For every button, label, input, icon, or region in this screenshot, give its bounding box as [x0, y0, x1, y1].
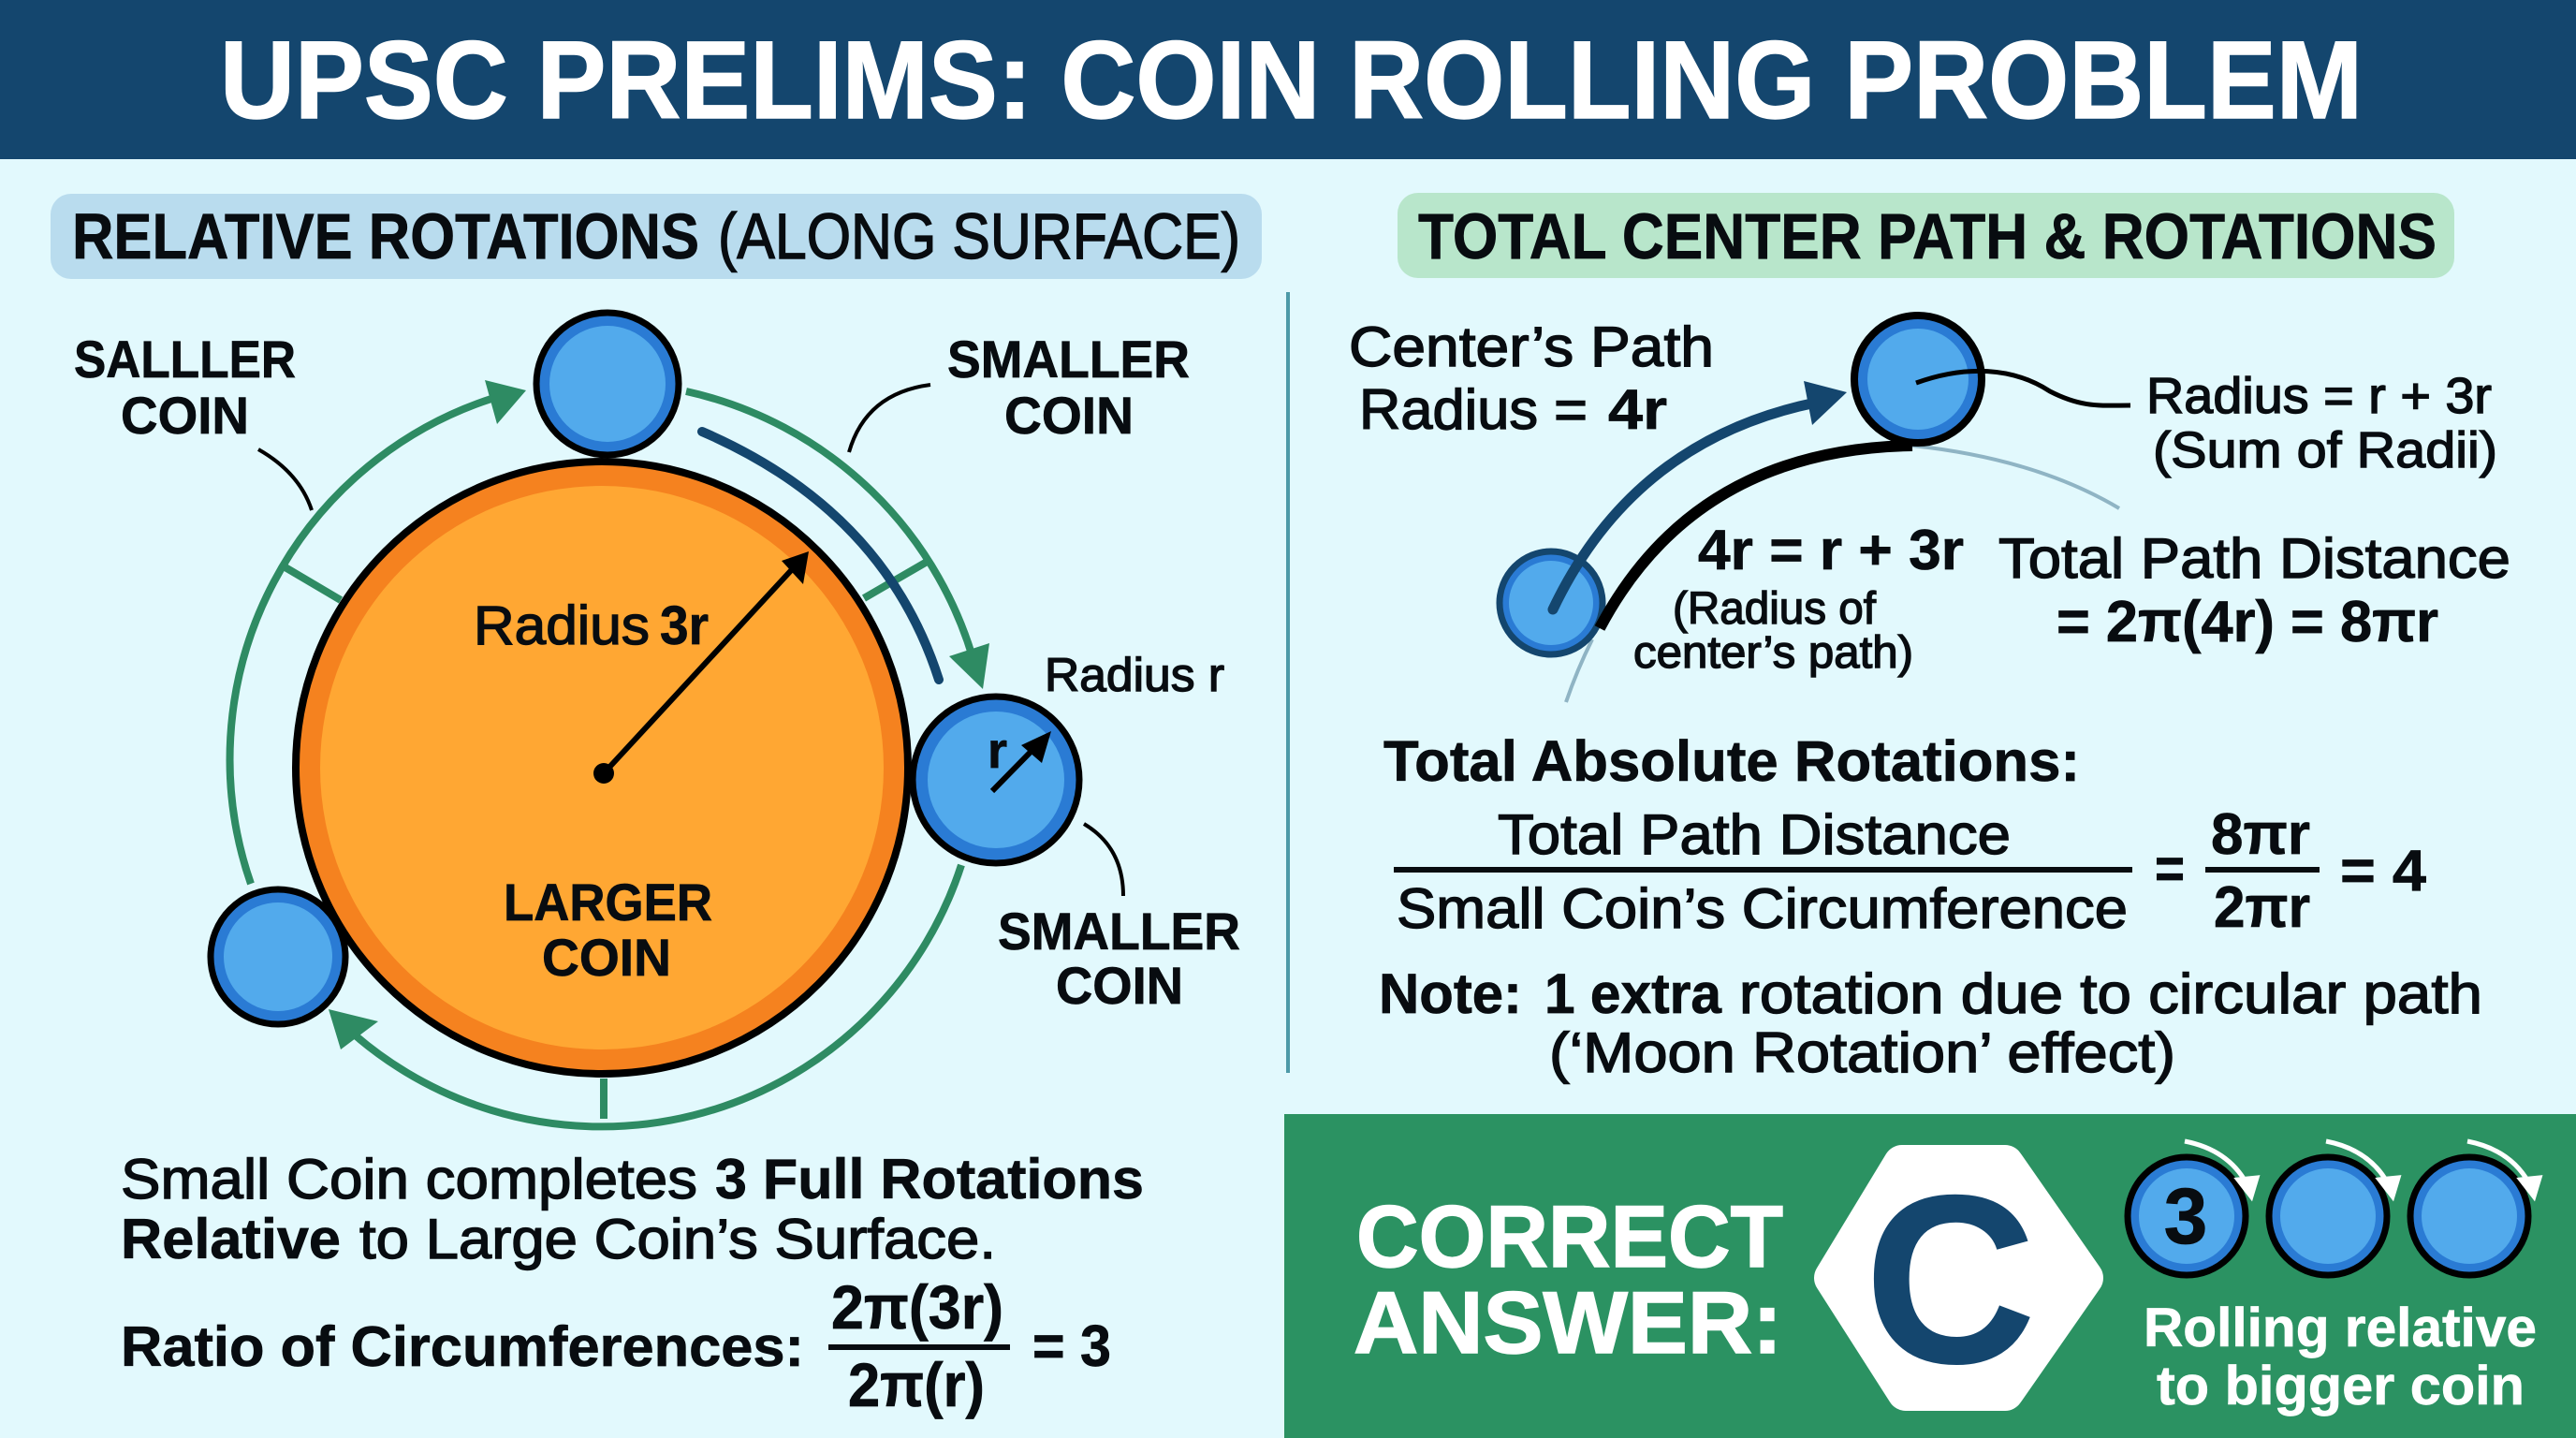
radius arrow of larger coin [593, 551, 809, 784]
text: total path distance [1998, 527, 2510, 654]
correct answer label [1354, 1187, 1783, 1372]
small coin: right with radius r [913, 697, 1079, 863]
formula: total absolute rotations: Total Absolute Rotations: [1383, 729, 2080, 793]
formula: total absolute rotations: Total Path Distance [1498, 803, 2011, 866]
formula: ratio of circumferences: 2π(r) [848, 1350, 985, 1419]
center path diagram [1500, 315, 2130, 702]
label: smaller coin (top right): SMALLER [947, 330, 1190, 389]
three rolling coins [2128, 1157, 2528, 1275]
formula: total absolute rotations [1383, 729, 2427, 940]
label: 4r = r + 3r: center’s path) [1633, 628, 1913, 678]
title: UPSC PRELIMS: COIN ROLLING PROBLEM [220, 19, 2363, 142]
label: smaller coin (lower right): SMALLER [998, 902, 1240, 961]
label: radius sum of radii [2146, 368, 2497, 478]
small coin: start [1500, 551, 1603, 654]
note: moon rotation [1379, 962, 2482, 1084]
heading: relative rotations: (ALONG SURFACE) [718, 200, 1240, 272]
small coin: top [1854, 315, 1982, 443]
label: radius r: Radius r [1045, 649, 1224, 701]
label: radius 3r: 3r [660, 595, 709, 656]
label: smaller coin (misspelt, left) [74, 330, 296, 445]
caption: rolling relative [2144, 1298, 2537, 1416]
small coin: right with radius r: r [988, 723, 1007, 779]
text: rotation summary: Small Coin completes [121, 1148, 697, 1211]
small coin: top [536, 313, 679, 455]
label: 4r = r + 3r: 4r = r + 3r [1698, 519, 1964, 581]
text: total path distance: = 2π(4r) = 8πr [2056, 590, 2438, 654]
divider between panels [1286, 292, 1290, 1073]
leader: top right label [849, 385, 930, 452]
heading: total center path: TOTAL CENTER PATH & ROTATIONS [1418, 200, 2437, 272]
label: center's path radius: 4r [1608, 378, 1667, 441]
three rolling coins: 3 [2164, 1172, 2207, 1260]
formula: total absolute rotations: Small Coin’s Circumference [1397, 877, 2128, 940]
label: center's path radius: Radius = [1359, 378, 1588, 441]
header banner [0, 0, 2576, 159]
correct answer label: CORRECT [1356, 1187, 1783, 1285]
answer hexagon [1833, 1146, 2085, 1414]
panel: correct answer [1284, 1114, 2576, 1438]
correct answer label: ANSWER: [1354, 1273, 1782, 1372]
note: moon rotation: rotation due to circular path [1739, 962, 2482, 1025]
caption: rolling relative: Rolling relative [2144, 1298, 2537, 1358]
caption: rolling relative: to bigger coin [2157, 1356, 2525, 1416]
label: larger coin [504, 873, 712, 987]
text: rotation summary: Relative [121, 1208, 341, 1270]
leader: radius sum [1916, 371, 2130, 405]
heading: relative rotations [51, 194, 1262, 279]
leader: left label [258, 449, 312, 510]
text: total path distance: Total Path Distance [1998, 527, 2510, 590]
formula: total absolute rotations: = 4 [2340, 839, 2427, 903]
thin larger coin outline [1912, 446, 2119, 508]
leader: lower right label [1084, 824, 1123, 896]
formula: ratio of circumferences: = 3 [1032, 1314, 1111, 1379]
text: rotation summary [121, 1148, 1144, 1270]
larger coin [296, 462, 908, 1074]
note: moon rotation: (‘Moon Rotation’ effect) [1549, 1021, 2175, 1084]
label: smaller coin (top right): COIN [1004, 386, 1134, 445]
label: 4r = r + 3r: (Radius of [1673, 584, 1877, 634]
formula: total absolute rotations: 2πr [2214, 875, 2310, 940]
label: center's path radius [1349, 315, 1714, 441]
label: 4r = r + 3r [1633, 519, 1964, 678]
rotation arrows [2185, 1141, 2539, 1196]
formula: ratio of circumferences: 2π(3r) [831, 1272, 1003, 1342]
small coin: lower left [211, 889, 345, 1024]
label: radius sum of radii: Radius = r + 3r [2146, 368, 2492, 424]
formula: ratio of circumferences: Ratio of Circumferences: [121, 1315, 804, 1378]
label: smaller coin (lower right) [998, 902, 1240, 1015]
answer hexagon: C [1865, 1146, 2036, 1414]
label: larger coin: COIN [542, 928, 671, 987]
green orbit arcs around larger coin [230, 380, 989, 1126]
label: smaller coin (misspelt, left): SALLLER [74, 330, 296, 389]
label: smaller coin (misspelt, left): COIN [121, 386, 249, 445]
label: smaller coin (lower right): COIN [1056, 956, 1183, 1015]
note: moon rotation: Note: [1379, 962, 1522, 1025]
label: larger coin: LARGER [504, 873, 712, 932]
heading: relative rotations: RELATIVE ROTATIONS [72, 200, 699, 272]
formula: total absolute rotations: = [2155, 837, 2185, 902]
formula: total absolute rotations: 8πr [2211, 802, 2310, 867]
text: rotation summary: to Large Coin’s Surface. [359, 1208, 996, 1270]
label: radius 3r: Radius [474, 595, 650, 656]
label: center's path radius: Center’s Path [1349, 315, 1714, 378]
text: rotation summary: 3 Full Rotations [715, 1148, 1144, 1211]
dark blue surface arc [702, 432, 939, 680]
label: radius sum of radii: (Sum of Radii) [2153, 422, 2497, 478]
center path arrow [1553, 381, 1847, 609]
formula: ratio of circumferences [121, 1272, 1111, 1419]
label: smaller coin (top right) [947, 330, 1190, 445]
black surface arc [1600, 446, 1912, 628]
note: moon rotation: 1 extra [1544, 962, 1722, 1025]
